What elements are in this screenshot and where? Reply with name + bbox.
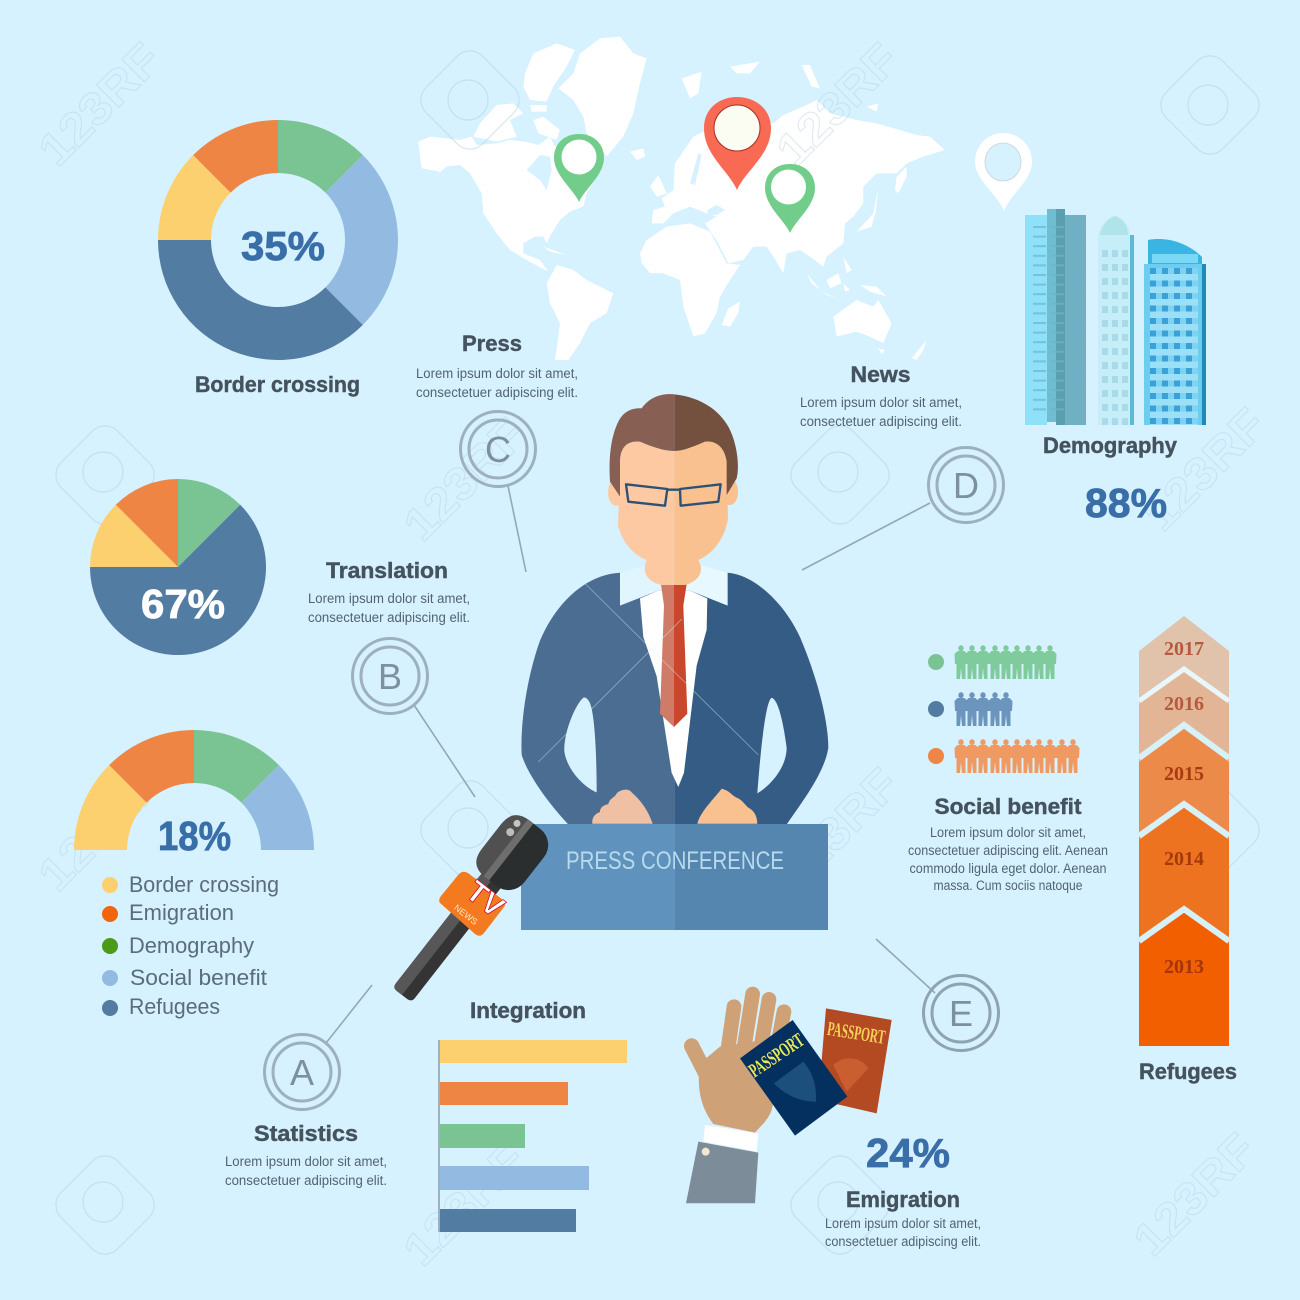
legend: Social benefit: [130, 965, 267, 990]
watermark stamps: 123RF: [28, 33, 171, 176]
world map: [418, 37, 945, 360]
podium: [521, 824, 828, 930]
map pin: green west: [554, 134, 604, 202]
callout A: A: [290, 1052, 314, 1093]
presenter figure: [521, 394, 828, 824]
refugees year arrows: 2013: [1164, 956, 1204, 978]
legend: [102, 872, 279, 1019]
donut chart: border crossing: [158, 120, 398, 360]
watermark stamps: 123RF: [766, 758, 909, 901]
map pin: white: [975, 133, 1032, 211]
news text block: Lorem ipsum dolor sit amet,: [800, 395, 962, 410]
translation text block: consectetuer adipiscing elit.: [308, 610, 470, 625]
refugees year arrows: 2014: [1164, 848, 1204, 870]
gauge chart: [74, 730, 314, 859]
icon: microphone: NEWS: [452, 902, 480, 927]
refugees year arrows: 2015: [1164, 763, 1204, 785]
social benefit text block: consectetuer adipiscing elit. Aenean: [908, 843, 1108, 858]
pie value: 67%: [141, 581, 225, 627]
news text block: [800, 362, 962, 429]
map pin: green east: [765, 164, 815, 233]
pictogram row: orange people: [928, 739, 1080, 773]
icon: microphone: [381, 808, 556, 1012]
emigration text block: Lorem ipsum dolor sit amet,: [825, 1216, 981, 1231]
callout D: [802, 448, 1004, 570]
social benefit text block: Lorem ipsum dolor sit amet,: [930, 825, 1086, 840]
legend: Demography: [129, 933, 254, 958]
translation text block: [308, 558, 470, 625]
refugees year arrows: 2016: [1164, 693, 1204, 715]
callout D: D: [953, 465, 979, 506]
donut value: 35%: [241, 223, 325, 269]
legend: Refugees: [129, 994, 220, 1019]
gauge value: 18%: [158, 813, 231, 859]
bar chart: integration: [439, 1040, 627, 1232]
press text block: Press: [462, 331, 522, 356]
icon: hand with passports: PASSPORT: [826, 1018, 887, 1049]
heading: integration: Integration: [470, 998, 586, 1023]
statistics text block: Statistics: [254, 1121, 358, 1146]
map pin: red: [704, 97, 771, 190]
callout C: [460, 412, 536, 572]
press text block: [416, 331, 578, 400]
emigration text block: consectetuer adipiscing elit.: [825, 1234, 981, 1249]
statistics text block: Lorem ipsum dolor sit amet,: [225, 1154, 387, 1169]
press text block: consectetuer adipiscing elit.: [416, 385, 578, 400]
refugees year arrows: [1139, 616, 1229, 1046]
press text block: Lorem ipsum dolor sit amet,: [416, 366, 578, 381]
heading: border crossing: Border crossing: [195, 372, 360, 397]
refugees year arrows: 2017: [1164, 638, 1204, 660]
watermark stamps: 123RF: [393, 1133, 536, 1276]
pictogram row: blue people: [928, 692, 1012, 726]
pictogram row: green people: [928, 645, 1056, 679]
icon: microphone: TV: [460, 875, 510, 924]
callout A: [264, 985, 372, 1110]
translation text block: Lorem ipsum dolor sit amet,: [308, 591, 470, 606]
heading: refugees: Refugees: [1139, 1059, 1237, 1084]
social benefit text block: massa. Cum sociis natoque: [934, 878, 1082, 893]
news text block: consectetuer adipiscing elit.: [800, 414, 962, 429]
legend: Emigration: [129, 900, 234, 925]
callout E: [876, 939, 998, 1050]
watermark stamps: 123RF: [1123, 1123, 1266, 1266]
watermark stamps: 123RF: [28, 758, 171, 901]
legend: Border crossing: [129, 872, 279, 897]
statistics text block: consectetuer adipiscing elit.: [225, 1173, 387, 1188]
watermark stamps: 123RF: [1133, 398, 1276, 541]
social benefit text block: commodo ligula eget dolor. Aenean: [910, 861, 1106, 876]
social benefit text block: Social benefit: [934, 794, 1082, 819]
icon: hand with passports: PASSPORT: [745, 1029, 809, 1082]
emigration text block: [825, 1130, 981, 1249]
news text block: News: [850, 362, 910, 387]
heading: demography: Demography: [1043, 433, 1178, 458]
demography value: 88%: [1085, 480, 1167, 526]
icon: hand with passports: [686, 994, 892, 1203]
callout C: C: [485, 429, 511, 470]
emigration text block: 24%: [866, 1130, 950, 1176]
watermark stamps: 123RF: [766, 33, 909, 176]
social benefit text block: [908, 794, 1108, 893]
pie chart: [90, 479, 266, 655]
callout E: E: [949, 993, 973, 1034]
callout B: [352, 638, 475, 797]
statistics text block: [225, 1121, 387, 1188]
icon: buildings: [1025, 209, 1206, 425]
podium label: PRESS CONFERENCE: [566, 847, 784, 875]
watermark stamps: 123RF: [393, 408, 536, 551]
callout B: B: [378, 656, 402, 697]
translation text block: Translation: [326, 558, 448, 583]
emigration text block: Emigration: [846, 1187, 960, 1212]
